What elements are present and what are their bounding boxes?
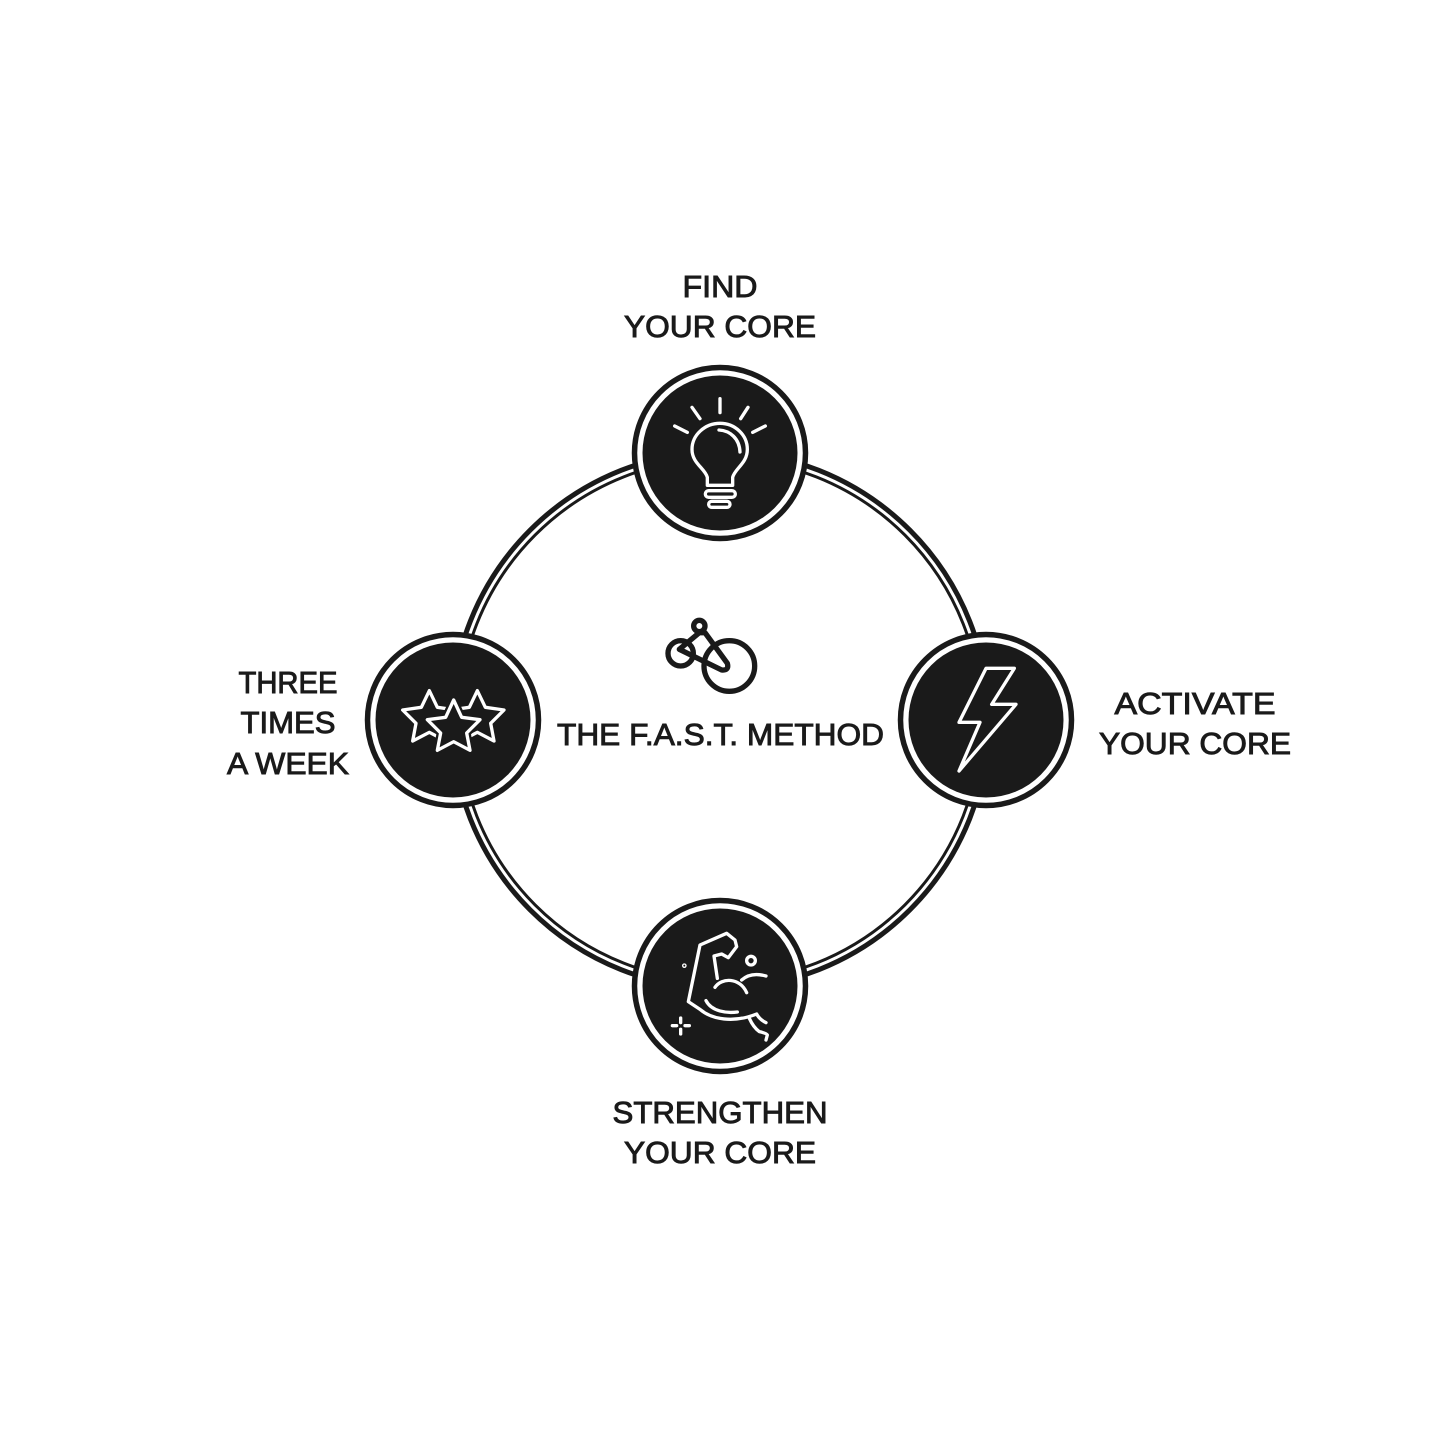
connecting ring <box>452 452 988 988</box>
node: find your core <box>634 368 806 538</box>
icon: light bulb <box>675 399 765 507</box>
node: activate your core <box>900 634 1072 806</box>
label: find your core: FIND <box>682 269 758 304</box>
label: activate your core: YOUR CORE <box>1099 726 1291 761</box>
icon: cycling loop logo <box>668 620 755 691</box>
icon: three stars <box>403 691 504 750</box>
icon: flexed arm <box>672 933 767 1040</box>
title: the f.a.s.t. method: THE F.A.S.T. METHOD <box>557 717 884 752</box>
label: find your core: YOUR CORE <box>624 309 816 344</box>
label: activate your core: ACTIVATE <box>1114 686 1276 721</box>
node: strengthen your core <box>634 900 806 1072</box>
label: three times a week: THREE <box>238 665 338 700</box>
label: three times a week: TIMES <box>240 705 336 740</box>
icon: lightning bolt <box>959 668 1016 771</box>
label: strengthen your core: STRENGTHEN <box>612 1095 828 1130</box>
node: three times a week <box>368 634 538 806</box>
label: strengthen your core: YOUR CORE <box>624 1135 816 1170</box>
label: three times a week: A WEEK <box>227 746 349 781</box>
